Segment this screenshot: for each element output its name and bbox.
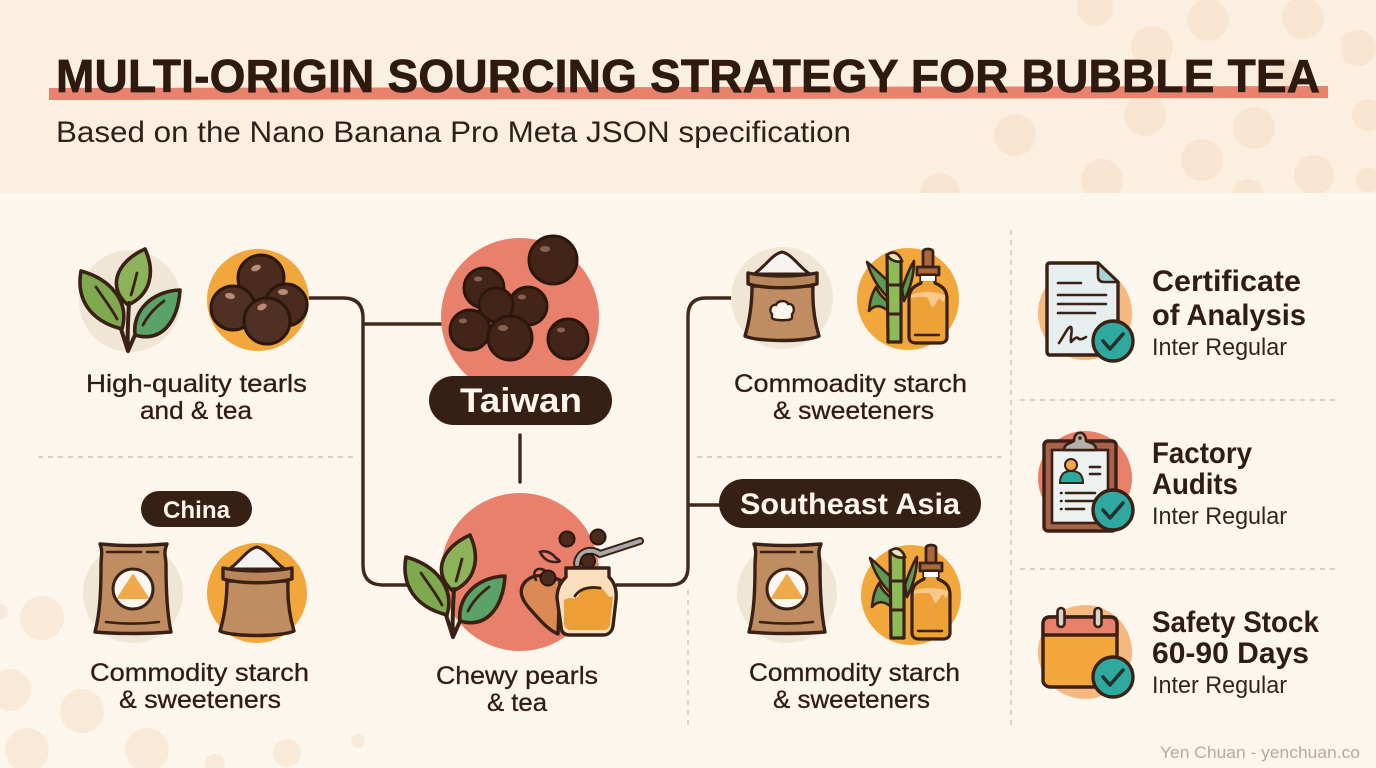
dashed dividers [38,230,1337,728]
top-left group: tea and pearls [79,249,309,425]
title underline [49,86,1328,100]
lower-left bubble pattern [0,596,365,768]
caption: Inter Regular [1152,503,1287,530]
connector: Taiwan to chewy pearls [518,435,522,482]
label: commodity starch [734,370,967,425]
label: commodity starch: Commodity starch [749,659,960,687]
pill: Taiwan [429,376,612,425]
heading: Certificate [1152,265,1301,298]
panel: safety stock [1038,605,1319,699]
label: chewy pearls [436,662,598,717]
label: commodity starch: & sweeteners [773,397,934,425]
center: Taiwan pearls [441,236,599,396]
icon: clipboard [1038,431,1133,531]
China group [83,491,309,714]
connector: left branch lines [310,298,441,585]
subtitle: Based on the Nano Banana Pro Meta JSON specification [56,116,851,149]
icon: honey jar and pearls [521,530,640,635]
Southeast Asia group [719,479,981,714]
heading: Audits [1152,468,1238,501]
icon: flour sack [731,247,833,349]
label: high-quality: High-quality tearls [86,370,307,398]
connector: right branch lines [617,298,731,585]
title: MULTI-ORIGIN SOURCING STRATEGY FOR BUBBLE TEA [56,50,1320,102]
icon: starch packet [83,543,183,643]
label: chewy pearls: & tea [487,689,547,717]
icon: starch packet [737,543,837,643]
header bubble pattern [920,0,1376,213]
icon: starch sack [207,543,307,643]
icon: tea leaves [405,535,505,637]
heading [1152,606,1319,670]
heading [1152,437,1252,501]
pill: China [141,491,252,527]
heading: 60-90 Days [1152,637,1309,670]
panel: certificate of analysis [1038,263,1306,361]
footer credit: Yen Chuan - yenchuan.co [1160,743,1360,762]
icon: tapioca pearls [207,249,309,351]
icon: calendar [1038,605,1133,699]
icon: sugar cane and syrup [861,545,961,645]
icon: tea leaves [79,249,181,352]
panel: factory audits [1038,431,1287,531]
heading [1152,265,1306,332]
icon: sugar cane and syrup [857,248,959,350]
pill: China: China [163,497,231,524]
label: commodity starch: Commoadity starch [734,370,967,398]
label: commodity starch [749,659,960,714]
label: high-quality: and & tea [140,397,252,425]
pill: Southeast Asia [719,479,981,528]
label: high-quality [86,370,307,425]
center bottom: chewy pearls and tea [405,493,640,717]
icon: certificate document [1038,263,1133,361]
heading: Factory [1152,437,1252,470]
label: commodity starch: & sweeteners [773,686,930,714]
label: commodity starch: Commodity starch [90,659,309,687]
label: chewy pearls: Chewy pearls [436,662,598,690]
label: commodity starch: & sweeteners [119,686,281,714]
top-right group [731,247,967,425]
coral circle [441,493,599,651]
heading: of Analysis [1152,299,1306,332]
heading: Safety Stock [1152,606,1319,639]
header band [0,0,1376,193]
pill: Taiwan: Taiwan [460,382,582,420]
caption: Inter Regular [1152,334,1287,361]
label: commodity starch [90,659,309,714]
pill: Southeast Asia: Southeast Asia [740,488,960,521]
caption: Inter Regular [1152,672,1287,699]
